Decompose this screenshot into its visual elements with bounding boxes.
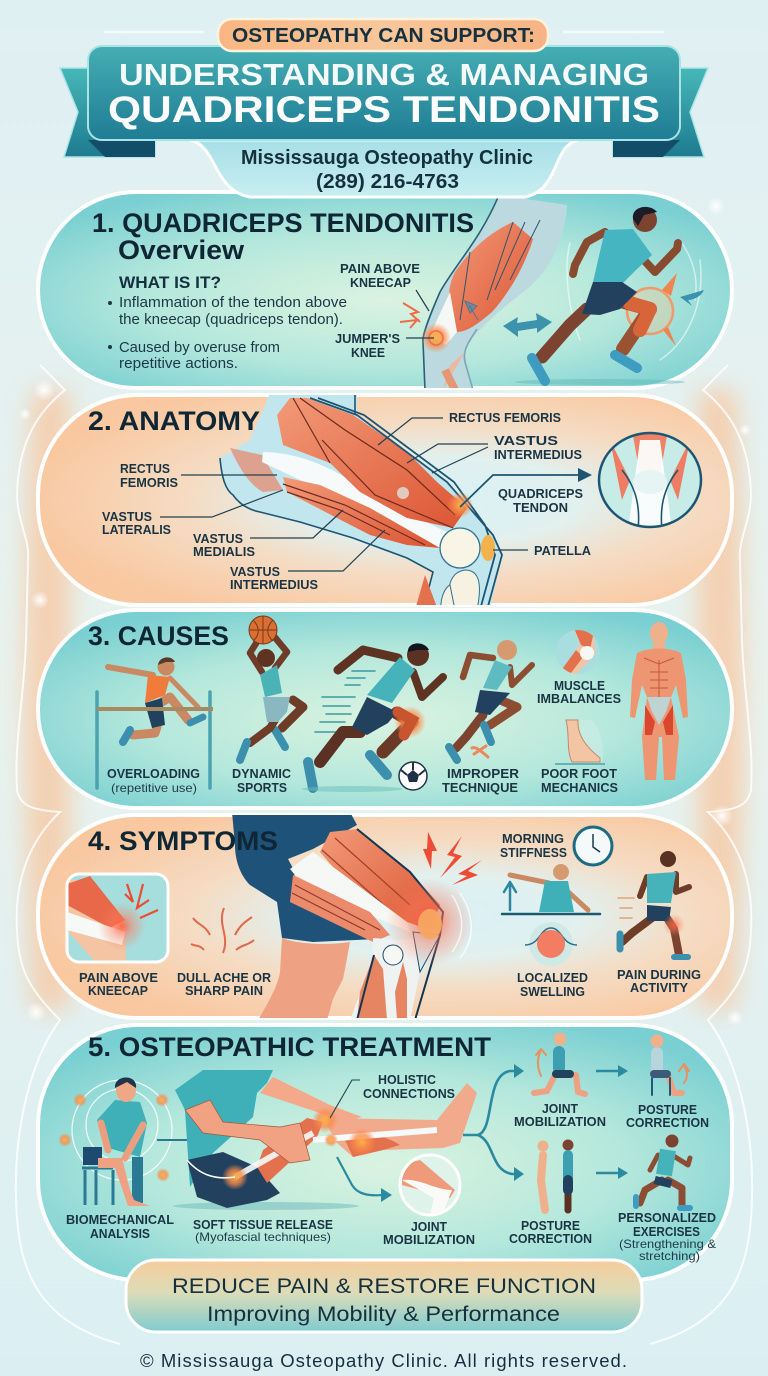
what is it: repetitive actions. bbox=[119, 356, 238, 372]
icon: ache squiggles bbox=[191, 908, 254, 953]
label: pain above kneecap bbox=[79, 971, 158, 998]
label: soft tissue release bbox=[193, 1218, 333, 1244]
label: muscle imbalances bbox=[537, 679, 621, 706]
inset: joint mobilization bbox=[400, 1155, 460, 1215]
label: personalized exercises bbox=[618, 1211, 716, 1263]
label: muscle imbalances: IMBALANCES bbox=[537, 692, 621, 706]
label: joint mobilization center: MOBILIZATION bbox=[383, 1233, 475, 1247]
callout lines bbox=[406, 290, 434, 338]
arrow: next step bottom bbox=[596, 1167, 628, 1179]
what is it: Inflammation of the tendon above bbox=[119, 295, 347, 311]
icon: foot bbox=[555, 720, 605, 764]
label: poor foot mechanics: MECHANICS bbox=[541, 781, 618, 795]
label: quadriceps tendon bbox=[498, 487, 583, 515]
label: improper technique: IMPROPER bbox=[447, 767, 519, 781]
illustration: biomechanical analysis bbox=[58, 1078, 172, 1206]
label: overloading: (repetitive use) bbox=[111, 781, 197, 795]
what is it bbox=[108, 273, 347, 372]
label: joint mobilization top bbox=[514, 1102, 606, 1129]
label: pain during activity: ACTIVITY bbox=[630, 981, 689, 995]
label: dynamic sports: DYNAMIC bbox=[232, 767, 291, 781]
label: holistic connections bbox=[363, 1073, 455, 1101]
illustration: stiffness stretch bbox=[502, 875, 600, 914]
main banner bbox=[88, 46, 680, 140]
label: improper technique: TECHNIQUE bbox=[442, 781, 518, 795]
tag text: OSTEOPATHY CAN SUPPORT: bbox=[232, 25, 535, 47]
label: vastus intermedius right bbox=[494, 434, 582, 462]
label: jumper's knee bbox=[335, 332, 400, 360]
callout lines bbox=[160, 418, 528, 571]
panel 5: osteopathic treatment bbox=[38, 1025, 732, 1280]
call to action: REDUCE PAIN & RESTORE FUNCTION bbox=[172, 1275, 596, 1298]
panel 4: symptoms bbox=[38, 812, 732, 1020]
label: rectus femoris left: RECTUS bbox=[120, 462, 170, 476]
figure: seated posture bbox=[650, 1034, 689, 1095]
arrows: treatment branches bbox=[463, 1064, 524, 1181]
what is it: WHAT IS IT? bbox=[119, 273, 221, 292]
label: personalized exercises: EXERCISES bbox=[633, 1225, 700, 1239]
tag bbox=[218, 19, 548, 51]
illustration: muscle body figure bbox=[630, 622, 688, 780]
label: pain above kneecap: KNEECAP bbox=[350, 276, 411, 290]
arrow: to tendon inset bbox=[460, 468, 592, 507]
label: personalized exercises: (Strengthening & bbox=[619, 1237, 716, 1251]
panel 3: causes bbox=[38, 610, 732, 808]
label: posture correction top bbox=[626, 1103, 709, 1130]
label: vastus lateralis: VASTUS bbox=[102, 510, 152, 524]
label: vastus intermedius lower: VASTUS bbox=[230, 565, 280, 579]
label: personalized exercises: stretching) bbox=[639, 1249, 700, 1263]
label: overloading bbox=[107, 767, 200, 795]
illustration: anatomical leg bbox=[220, 393, 502, 610]
footer copyright: © Mississauga Osteopathy Clinic. All rights reserved. bbox=[140, 1350, 627, 1371]
label: vastus medialis bbox=[193, 532, 255, 559]
label: quadriceps tendon: TENDON bbox=[513, 501, 568, 515]
panel 2: anatomy bbox=[38, 393, 732, 610]
icon: clock bbox=[574, 827, 612, 865]
inset: pain above kneecap bbox=[67, 874, 168, 962]
label: joint mobilization center: JOINT bbox=[411, 1220, 447, 1234]
figure: kneeling mobilization bbox=[534, 1032, 585, 1094]
what is it: Caused by overuse from bbox=[119, 340, 280, 356]
label: vastus medialis: MEDIALIS bbox=[193, 545, 255, 559]
label: vastus intermedius lower bbox=[230, 565, 318, 592]
label: joint mobilization top: MOBILIZATION bbox=[514, 1115, 606, 1129]
arrows: knee force bbox=[662, 273, 677, 346]
label: personalized exercises: PERSONALIZED bbox=[618, 1211, 716, 1225]
label: vastus lateralis: LATERALIS bbox=[102, 523, 171, 537]
label: localized swelling: SWELLING bbox=[520, 985, 585, 999]
clinic name: Mississauga Osteopathy Clinic bbox=[241, 147, 533, 169]
arrow: next step top bbox=[596, 1065, 628, 1077]
label: joint mobilization center bbox=[383, 1220, 475, 1247]
illustration: sprinter with soccer ball bbox=[308, 650, 443, 788]
illustration: soft tissue release bbox=[173, 1070, 477, 1210]
what is it: the kneecap (quadriceps tendon). bbox=[119, 312, 343, 328]
heading: 2. ANATOMY bbox=[88, 406, 260, 436]
label: pain during activity bbox=[617, 968, 701, 995]
illustration: large knee bbox=[232, 812, 474, 1020]
panel 1: overview bbox=[38, 192, 732, 390]
label: holistic connections: HOLISTIC bbox=[378, 1073, 436, 1087]
title line one: UNDERSTANDING & MANAGING bbox=[119, 57, 649, 92]
illustration: runner bbox=[515, 232, 701, 385]
label: morning stiffness bbox=[500, 832, 567, 860]
label: poor foot mechanics bbox=[541, 767, 618, 795]
label: biomechanical analysis: BIOMECHANICAL bbox=[66, 1213, 174, 1227]
label: vastus intermedius right: VASTUS bbox=[494, 434, 558, 448]
illustration: running pain bbox=[618, 874, 689, 957]
label: dull ache: DULL ACHE OR bbox=[177, 971, 271, 985]
label: pain above kneecap: KNEECAP bbox=[88, 984, 148, 998]
figures: posture comparison bbox=[538, 1140, 574, 1210]
ribbon tail left bbox=[60, 68, 155, 157]
icon: pain bolts bbox=[423, 832, 482, 885]
label: posture correction bottom bbox=[509, 1219, 592, 1246]
label: posture correction bottom: POSTURE bbox=[521, 1219, 580, 1233]
contact plate bbox=[190, 140, 578, 197]
label: quadriceps tendon: QUADRICEPS bbox=[498, 487, 583, 501]
label: muscle imbalances: MUSCLE bbox=[554, 679, 605, 693]
heading: 1. QUADRICEPS TENDONITIS bbox=[92, 208, 474, 238]
label: poor foot mechanics: POOR FOOT bbox=[541, 767, 617, 781]
label: posture correction top: CORRECTION bbox=[626, 1116, 709, 1130]
label: holistic connections: CONNECTIONS bbox=[363, 1087, 455, 1101]
label: posture correction top: POSTURE bbox=[638, 1103, 697, 1117]
illustration: basketball player bbox=[240, 635, 303, 760]
label: joint mobilization top: JOINT bbox=[542, 1102, 578, 1116]
ribbon tail right bbox=[613, 68, 708, 157]
label: rectus femoris right: RECTUS FEMORIS bbox=[449, 411, 561, 425]
label: pain above kneecap: PAIN ABOVE bbox=[340, 262, 420, 276]
call to action: Improving Mobility & Performance bbox=[207, 1303, 560, 1326]
illustration: leg with knee pain bbox=[400, 195, 567, 390]
label: vastus intermedius lower: INTERMEDIUS bbox=[230, 578, 318, 592]
label: patella: PATELLA bbox=[534, 544, 591, 558]
label: vastus intermedius right: INTERMEDIUS bbox=[494, 448, 582, 462]
label: soft tissue release: (Myofascial techniques) bbox=[195, 1230, 331, 1244]
heading: 5. OSTEOPATHIC TREATMENT bbox=[88, 1032, 492, 1062]
label: dynamic sports bbox=[232, 767, 291, 795]
heading: 4. SYMPTOMS bbox=[88, 826, 278, 856]
label: improper technique bbox=[442, 767, 519, 795]
side glow decoration bbox=[24, 390, 744, 1010]
phone: (289) 216-4763 bbox=[316, 171, 459, 193]
illustration: improper technique runner bbox=[449, 655, 532, 760]
label: biomechanical analysis: ANALYSIS bbox=[90, 1227, 150, 1241]
label: morning stiffness: STIFFNESS bbox=[500, 846, 567, 860]
label: jumper's knee: JUMPER'S bbox=[335, 332, 400, 346]
arrow: to joint mobilization inset bbox=[337, 1157, 392, 1202]
label: vastus lateralis bbox=[102, 510, 171, 537]
icon: double arrow bbox=[503, 313, 552, 337]
header: title banner bbox=[60, 19, 708, 197]
label: overloading: OVERLOADING bbox=[107, 767, 200, 781]
label: rectus femoris left: FEMORIS bbox=[120, 476, 178, 490]
illustration: hurdle jumper bbox=[97, 667, 210, 788]
label: dull ache: SHARP PAIN bbox=[185, 984, 263, 998]
label: jumper's knee: KNEE bbox=[351, 346, 385, 360]
icon: muscle imbalance bbox=[556, 630, 600, 674]
label: rectus femoris left bbox=[120, 462, 178, 490]
label: vastus medialis: VASTUS bbox=[193, 532, 243, 546]
label: localized swelling bbox=[517, 971, 588, 999]
callout line: holistic connections bbox=[330, 1080, 360, 1118]
label: dull ache bbox=[177, 971, 271, 998]
figure: lunge exercise bbox=[636, 1134, 690, 1208]
label: pain above kneecap: PAIN ABOVE bbox=[79, 971, 158, 985]
heading: 3. CAUSES bbox=[88, 621, 229, 651]
sub-heading: Overview bbox=[118, 235, 245, 265]
label: pain above kneecap bbox=[340, 262, 420, 290]
call to action bbox=[126, 1260, 642, 1332]
title line two: QUADRICEPS TENDONITIS bbox=[108, 89, 660, 130]
label: localized swelling: LOCALIZED bbox=[517, 971, 588, 985]
icon: soccer ball bbox=[399, 762, 427, 790]
label: pain during activity: PAIN DURING bbox=[617, 968, 701, 982]
icon: swelling bbox=[525, 922, 577, 966]
label: dynamic sports: SPORTS bbox=[237, 781, 287, 795]
label: morning stiffness: MORNING bbox=[502, 832, 564, 846]
inset: quadriceps tendon bbox=[599, 430, 701, 530]
label: posture correction bottom: CORRECTION bbox=[509, 1232, 592, 1246]
label: soft tissue release: SOFT TISSUE RELEASE bbox=[193, 1218, 333, 1232]
label: biomechanical analysis bbox=[66, 1213, 174, 1241]
